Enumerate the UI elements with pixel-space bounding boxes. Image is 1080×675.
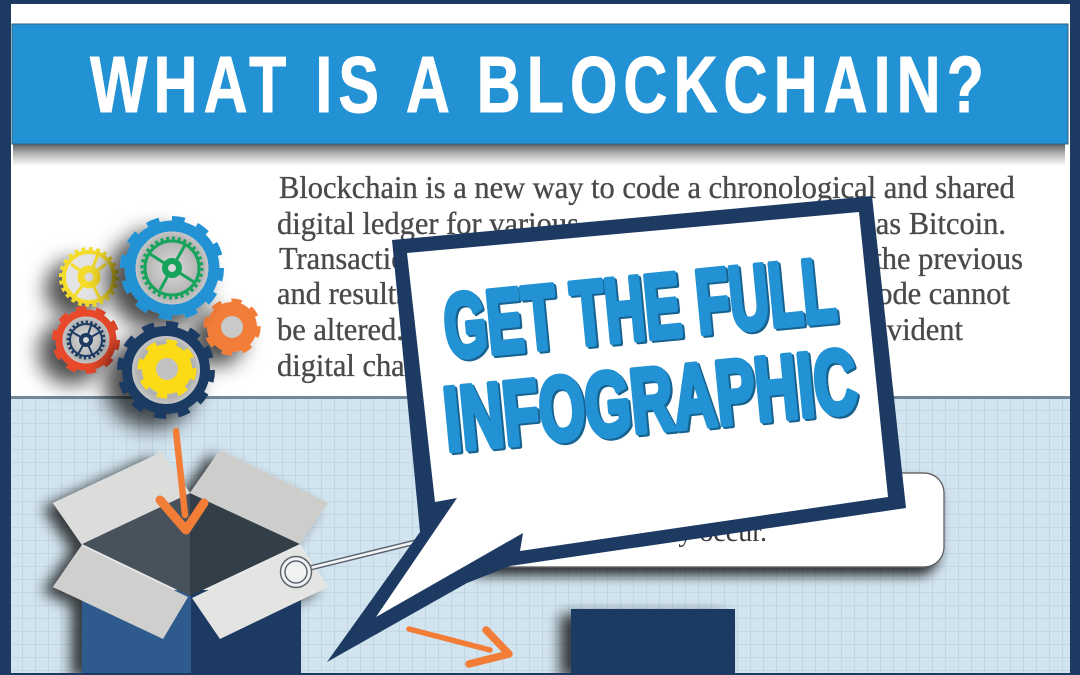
intro text: and results bbox=[277, 275, 408, 311]
bubble heading: INFOGRAPHIC bbox=[439, 331, 861, 471]
intro text: Transactions bbox=[279, 240, 434, 276]
arrow: to second box bbox=[409, 629, 509, 664]
second box bbox=[571, 609, 735, 673]
bubble heading: INFOGRAPHIC bbox=[441, 332, 863, 473]
intro text: be altered. bbox=[277, 311, 404, 347]
callout connector bbox=[280, 541, 420, 588]
box shadow caster bbox=[53, 450, 328, 673]
icon: gears bbox=[54, 219, 257, 416]
intro text bbox=[277, 169, 1023, 383]
grid background panel bbox=[11, 396, 1070, 673]
intro text: digital ledger for various bbox=[277, 205, 579, 241]
title banner bbox=[12, 24, 1068, 144]
arrow: into box bbox=[160, 431, 204, 530]
bubble heading bbox=[439, 240, 863, 473]
intro text: digital chain bbox=[277, 347, 429, 383]
bubble heading: GET THE FULL bbox=[439, 240, 840, 378]
intro text: as Bitcoin. bbox=[876, 205, 1006, 241]
box body bbox=[82, 590, 192, 673]
flaps bbox=[53, 452, 190, 544]
intro text: the previous bbox=[873, 240, 1023, 276]
gear: red bbox=[54, 308, 118, 372]
banner shadow bbox=[13, 144, 1065, 166]
intro text: evident bbox=[873, 311, 963, 347]
gear: blue large bbox=[123, 219, 221, 317]
callout text: y occur. bbox=[678, 517, 767, 548]
box interior bbox=[82, 493, 190, 596]
white content area bbox=[11, 4, 1070, 398]
gear: navy large bbox=[120, 324, 212, 416]
icon: open box bbox=[53, 450, 328, 673]
gear: orange bbox=[207, 302, 257, 352]
speech bubble bbox=[327, 196, 906, 662]
intro text: code cannot bbox=[864, 275, 1010, 311]
intro text: Blockchain is a new way to code a chronological and shared bbox=[279, 169, 1015, 205]
gear: yellow small bbox=[61, 249, 117, 305]
callout box with text bbox=[470, 473, 944, 567]
